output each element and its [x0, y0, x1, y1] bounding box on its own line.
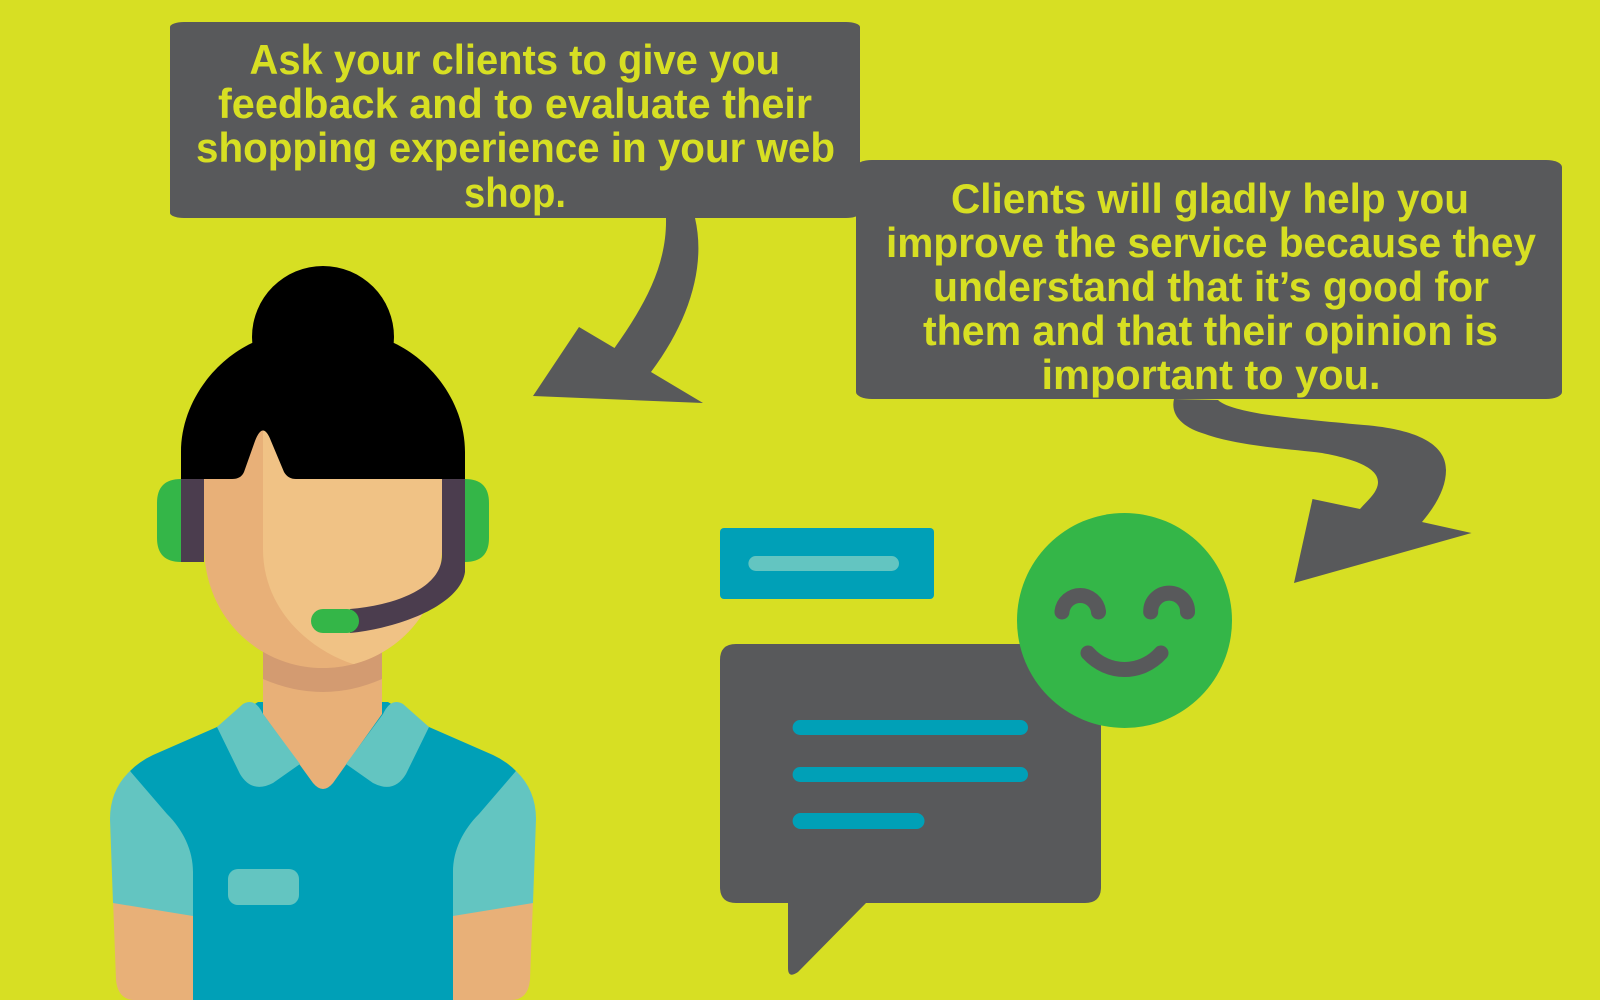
- icon: positive feedback: [720, 513, 1232, 975]
- agent badge: [228, 869, 299, 905]
- bubble text lines: [793, 720, 1028, 829]
- callout: ask for feedback: shop.: [464, 169, 566, 216]
- agent arms: [113, 900, 533, 1000]
- agent neck shadow: [263, 650, 382, 692]
- arrow: from first callout to agent: [533, 218, 703, 403]
- callout: ask for feedback: shopping experience in your web: [196, 124, 835, 171]
- agent shirt: [130, 702, 516, 1000]
- callout: clients gladly help: understand that it’s good for: [933, 263, 1489, 310]
- agent neck: [263, 640, 382, 789]
- icon: customer service agent: [110, 266, 536, 1000]
- callout: ask for feedback: feedback and to evaluate their: [218, 80, 812, 127]
- headset microphone: [311, 609, 359, 633]
- callout: ask for feedback: Ask your clients to give you: [250, 36, 780, 83]
- headset band: [181, 479, 465, 633]
- agent hair: [181, 266, 465, 479]
- smiley face: [1017, 513, 1232, 728]
- callout: clients gladly help: them and that their opinion is: [923, 307, 1498, 354]
- callout: clients gladly help: improve the service because they: [886, 219, 1537, 266]
- speech bubble: [720, 644, 1101, 975]
- headset ear cups: [157, 479, 489, 562]
- callout: clients gladly help: [856, 160, 1562, 399]
- rating bar: [720, 528, 934, 599]
- callout: ask for feedback: [170, 22, 860, 218]
- agent sleeves: [110, 771, 536, 916]
- callout: clients gladly help: important to you.: [1042, 351, 1380, 398]
- arrow: from second callout to smiley: [1173, 399, 1472, 583]
- callout: clients gladly help: Clients will gladly help you: [951, 175, 1469, 222]
- agent face: [204, 425, 460, 668]
- agent collar: [217, 702, 429, 787]
